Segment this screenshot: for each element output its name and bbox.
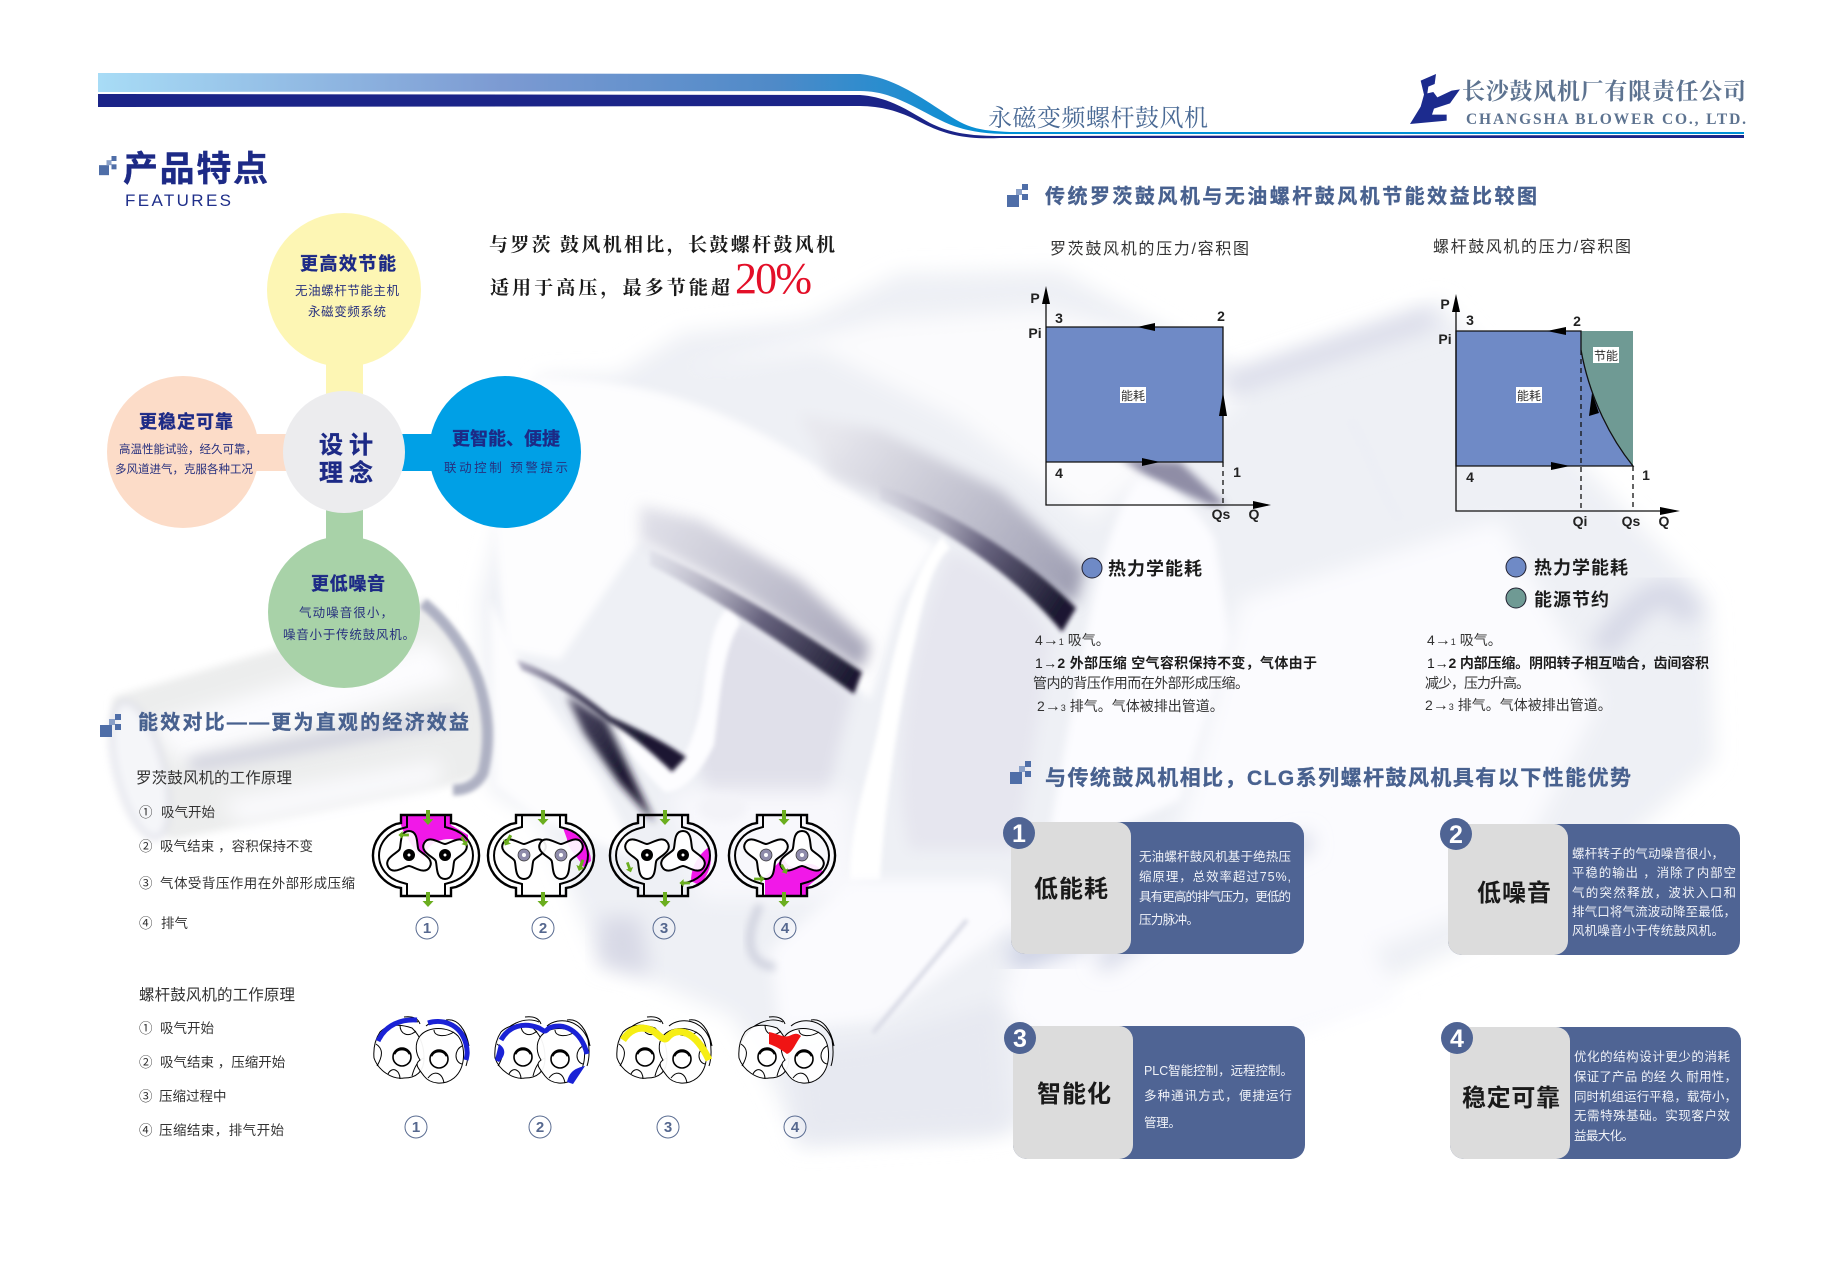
chart: roots pressure volume: P (1030, 290, 1040, 306)
screw numbers: 4 (791, 1119, 800, 1136)
card 1: low energy: 1 (1012, 820, 1026, 848)
rotor numbers: 4 (781, 920, 790, 937)
circle: smart (429, 376, 581, 528)
card 3: smart: 3 (1013, 1025, 1027, 1053)
chart: screw pressure volume: Qs (1622, 513, 1641, 529)
screw principle list: 螺杆鼓风机的工作原理 (139, 986, 295, 1004)
card 4: reliable: 稳定可靠 (1462, 1085, 1560, 1112)
chart: roots pressure volume: 能耗 (1121, 389, 1145, 403)
card 2: low noise: 平稳的输出 ，消除了内部空 (1572, 865, 1736, 880)
description: screw cycle: 1→2 内部压缩。阴阳转子相互啮合，齿间容积 (1427, 655, 1709, 671)
card 1: low energy: 具有更高的排气压力，更低的 (1139, 889, 1291, 904)
card 2: low noise: 风机噪音小于传统鼓风机。 (1572, 923, 1724, 938)
description: roots cycle: 2→3 排气。气体被排出管道。 (1037, 698, 1224, 715)
circle: smart: 联动控制 预警提示 (444, 460, 568, 475)
lobe B interior (698, 618, 852, 880)
chart: screw pressure volume: 能耗 (1517, 389, 1541, 403)
screw principle list: 压缩过程中 (159, 1089, 226, 1104)
rotor numbers (416, 917, 796, 939)
card 3: smart (1004, 1022, 1305, 1159)
white beyond ring (490, 600, 640, 860)
heading: performance advantages: 与传统鼓风机相比，CLG系列螺杆鼓风机具有以下性能优势 (1045, 766, 1631, 790)
chart: roots pressure volume: 2 (1217, 308, 1225, 324)
circle: reliable (107, 376, 259, 528)
rotor 2 (488, 810, 594, 907)
roots principle list: ③ (139, 876, 152, 891)
card 1: low energy: 低能耗 (1034, 876, 1108, 903)
card 1: low energy: 缩原理，总效率超过75%, (1139, 869, 1291, 884)
card 1: low energy: 压力脉冲。 (1139, 912, 1199, 927)
chart: screw pressure volume (1433, 238, 1680, 529)
company name: CHANGSHA BLOWER CO., LTD. (1466, 111, 1746, 128)
screw 1 (374, 1017, 469, 1083)
card 3: smart: 管理。 (1144, 1115, 1181, 1130)
concept diagram (107, 213, 581, 688)
screw numbers: 3 (664, 1119, 672, 1136)
card 3: smart: PLC智能控制，远程控制。 (1144, 1063, 1293, 1078)
roots principle list: ① (139, 805, 152, 820)
screw 2 (495, 1017, 590, 1084)
heading: energy comparison: 能效对比——更为直观的经济效益 (138, 710, 469, 734)
screw principle list: ④ (139, 1123, 152, 1138)
card 3: smart: 智能化 (1037, 1081, 1111, 1108)
roots principle list (136, 769, 355, 931)
description: screw cycle: 减少，压力升高。 (1425, 675, 1530, 691)
shaft (113, 600, 490, 840)
card 4: reliable: 同时机组运行平稳，载荷小， (1574, 1089, 1737, 1104)
circle: reliable: 更稳定可靠 (139, 411, 233, 432)
card 1: low energy: 无油螺杆鼓风机基于绝热压 (1139, 849, 1291, 864)
card 2: low noise: 2 (1449, 821, 1463, 849)
screw principle list: 吸气开始 (160, 1021, 214, 1036)
chart: roots pressure volume: Q (1249, 506, 1260, 522)
card 1: low energy (1003, 817, 1304, 954)
roots principle list: 吸气开始 (161, 805, 215, 820)
chart: screw pressure volume: P (1440, 296, 1450, 312)
lobe E (1045, 478, 1230, 860)
roots principle list: 吸气结束 ，容积保持不变 (160, 838, 313, 854)
screw numbers: 1 (412, 1119, 420, 1136)
card 2: low noise: 低噪音 (1477, 880, 1551, 907)
rotor numbers: 2 (539, 920, 547, 937)
screw numbers (405, 1116, 806, 1138)
rotor numbers: 1 (423, 920, 431, 937)
rotor numbers: 3 (660, 920, 668, 937)
card 2: low noise (1440, 818, 1740, 955)
roots principle list: ② (139, 839, 152, 854)
description: screw cycle: 4→1 吸气。 (1427, 632, 1502, 649)
screw principle list: ② (139, 1055, 152, 1070)
chart: screw pressure volume: 节能 (1594, 349, 1618, 363)
description: screw cycle (1425, 632, 1709, 714)
chart: screw pressure volume: 2 (1573, 313, 1581, 329)
fold lines (873, 920, 967, 1033)
card 4: reliable: 4 (1450, 1025, 1464, 1053)
circle: low noise (268, 536, 420, 688)
roots principle list: 排气 (161, 916, 188, 931)
chart: roots pressure volume: 1 (1233, 464, 1241, 480)
description: screw cycle: 2→3 排气。气体被排出管道。 (1425, 697, 1612, 714)
circle: smart: 更智能、便捷 (452, 428, 560, 449)
centre circle: 理 念 (319, 459, 373, 487)
roots principle list: 罗茨鼓风机的工作原理 (136, 769, 292, 787)
screw 3 (617, 1017, 712, 1083)
chart: screw pressure volume: Pi (1438, 331, 1452, 347)
description: roots cycle (1033, 632, 1317, 715)
screw principle list: ③ (139, 1089, 152, 1104)
statement (489, 234, 835, 303)
chart: screw pressure volume: 3 (1466, 312, 1474, 328)
chart: roots pressure volume: 4 (1055, 465, 1063, 481)
card 4: reliable: 保证了产品 的经 久 耐用性， (1574, 1069, 1737, 1084)
rotor 3 (610, 810, 716, 907)
circle: high efficiency (267, 213, 421, 367)
rotor 4 (729, 810, 835, 907)
statement: 与罗茨 鼓风机相比，长鼓螺杆鼓风机 (489, 234, 835, 256)
circle: low noise: 更低噪音 (311, 573, 385, 594)
description: roots cycle: 管内的背压作用而在外部形成压缩。 (1033, 675, 1249, 691)
groove halos (640, 505, 870, 670)
header band (98, 73, 1744, 138)
dark grooves A and B (650, 550, 862, 694)
centre circle: 设 计 (319, 432, 373, 459)
circle: reliable: 多风道进气，克服各种工况 (115, 462, 254, 476)
card 4: reliable: 无需特殊基础。实现客户效 (1574, 1108, 1730, 1123)
roots principle list: ④ (139, 916, 152, 931)
upper lobe shading (680, 310, 1240, 520)
legend: roots: 热力学能耗 (1108, 558, 1202, 579)
header subtitle: 永磁变频螺杆鼓风机 (988, 105, 1208, 132)
statement: 20% (735, 254, 812, 303)
legend: screw (1506, 557, 1628, 610)
screw principle list: 吸气结束 ，压缩开始 (160, 1055, 286, 1070)
lobe A interior (901, 552, 1052, 850)
chart: roots pressure volume: 3 (1055, 310, 1063, 326)
company name (1462, 79, 1746, 128)
card 2: low noise: 螺杆转子的气动噪音很小， (1572, 846, 1724, 861)
circle: low noise: 气动噪音很小， (299, 605, 393, 620)
circle: high efficiency: 无油螺杆节能主机 (295, 284, 399, 298)
card 2: low noise: 排气口将气流波动降至最低， (1572, 904, 1736, 919)
chart: screw pressure volume: Q (1659, 513, 1670, 529)
chart: screw pressure volume: 螺杆鼓风机的压力/容积图 (1433, 238, 1631, 256)
circle: high efficiency: 永磁变频系统 (308, 304, 386, 319)
chart: roots pressure volume: Qs (1212, 506, 1231, 522)
circle: high efficiency: 更高效节能 (300, 253, 396, 274)
chart: screw pressure volume: Qi (1573, 513, 1587, 529)
centre circle (283, 391, 405, 513)
legend: screw: 能源节约 (1534, 590, 1609, 610)
legend: screw: 热力学能耗 (1534, 557, 1628, 578)
screw 4 (739, 1017, 834, 1083)
company name: 长沙鼓风机厂有限责任公司 (1462, 79, 1746, 104)
chart: screw pressure volume: 1 (1642, 467, 1650, 483)
screw principle list (139, 986, 295, 1138)
statement: 适用于高压，最多节能超 (490, 276, 730, 299)
white lobe 1 (490, 377, 935, 700)
heading: savings comparison: 传统罗茨鼓风机与无油螺杆鼓风机节能效益比较图 (1045, 184, 1537, 208)
description: roots cycle: 4→1 吸气。 (1035, 632, 1110, 649)
circle: reliable: 高温性能试验，经久可靠， (119, 442, 257, 456)
heading: features: 产品特点 (123, 150, 268, 189)
screw principle list: 压缩结束，排气开始 (159, 1123, 284, 1138)
card 2: low noise: 气的突然释放，波状入口和 (1572, 885, 1736, 900)
card 4: reliable: 益最大化。 (1574, 1129, 1634, 1143)
connectors (255, 360, 434, 540)
chart: roots pressure volume: 罗茨鼓风机的压力/容积图 (1050, 240, 1249, 258)
hub at bottom (698, 794, 746, 822)
screw numbers: 2 (536, 1119, 544, 1136)
chart: roots pressure volume: Pi (1028, 325, 1042, 341)
description: roots cycle: 1→2 外部压缩 空气容积保持不变，气体由于 (1035, 655, 1317, 671)
rotor 1 (373, 810, 479, 907)
heading: features (99, 150, 268, 210)
card 3: smart: 多种通讯方式，便捷运行 (1144, 1088, 1292, 1103)
groove C (517, 660, 686, 772)
card 4: reliable: 优化的结构设计更少的消耗 (1574, 1049, 1730, 1064)
roots principle list: 气体受背压作用在外部形成压缩 (160, 876, 355, 891)
heading: features: FEATURES (125, 191, 231, 210)
circle: low noise: 噪音小于传统鼓风机。 (283, 627, 415, 642)
roots rotor diagrams (373, 810, 835, 939)
screw rotor diagrams (374, 1017, 834, 1138)
company logo (1410, 74, 1460, 124)
screw principle list: ① (139, 1021, 152, 1036)
chart: screw pressure volume: 4 (1466, 469, 1474, 485)
chart: roots pressure volume (1028, 240, 1271, 522)
card 4: reliable (1441, 1022, 1741, 1159)
